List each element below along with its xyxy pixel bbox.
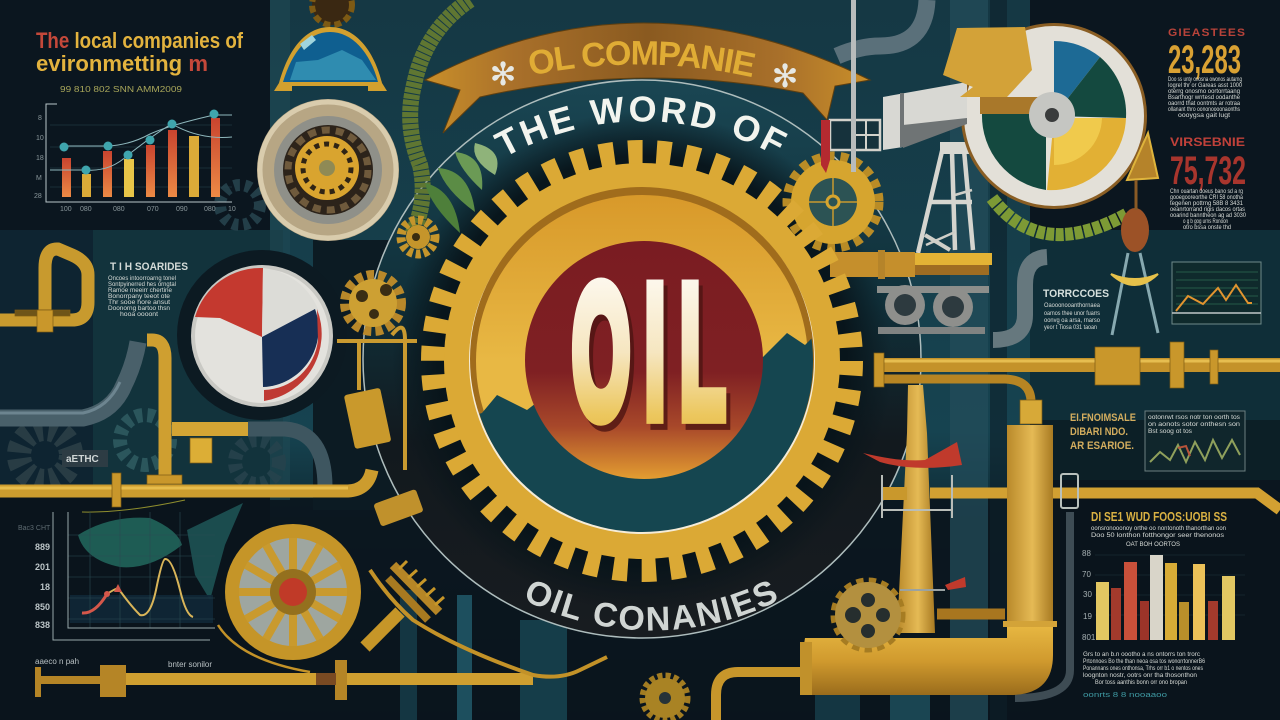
icon: pipe flanges and valves — [15, 310, 1218, 507]
stat body 2 — [1170, 189, 1247, 231]
bottom left labels: aaeco n pah — [35, 657, 79, 666]
heading — [1070, 412, 1136, 452]
bar chart: 10 — [36, 135, 44, 142]
stat body 1: oooygsa gait lugt — [1178, 113, 1230, 119]
panel: right text and mini chart — [1070, 411, 1245, 471]
body text — [1083, 652, 1206, 686]
icon: pie wheel top right — [961, 23, 1147, 209]
bar chart: 070 — [147, 206, 159, 213]
icon: pipe valve bottom left — [35, 660, 347, 700]
heading: DIBARI NDO. — [1070, 426, 1128, 438]
body text: yeor t Tiosa 031 taoan — [1044, 325, 1097, 331]
icon: gear and lock mechanism — [337, 276, 424, 527]
heading: AR ESARIOE. — [1070, 440, 1134, 452]
bar chart: 090 — [176, 206, 188, 213]
teal ring — [479, 333, 813, 532]
body text: Thr sooe hore ansut — [108, 300, 170, 306]
stat body 2: gooegooreorthe CRI 58 onotha — [1170, 195, 1244, 201]
icon: brass gear on pipe — [835, 582, 901, 648]
panel: lower left line chart — [18, 500, 243, 640]
bar chart — [1082, 549, 1245, 642]
icon: machine wheels — [877, 285, 989, 334]
stat body 1: ollanant thro oononoooonaonths — [1168, 107, 1240, 113]
bar chart: 100 — [60, 206, 72, 213]
bar chart: 19 — [1083, 612, 1092, 621]
stat body 1: Iogrel thr or Gareas asst 1000 — [1168, 83, 1243, 89]
subtitle: 99 810 802 SNN AMM2009 — [60, 85, 183, 94]
icon: small gear at right of centre — [787, 156, 879, 248]
bar chart: 801 — [1082, 633, 1096, 642]
oil text: OIL — [572, 248, 740, 457]
heading: EI.FNOIMSALE — [1070, 412, 1136, 424]
stat body 1 — [1168, 77, 1243, 119]
icon: hammer tool — [365, 561, 444, 647]
icon: garland — [992, 198, 1127, 235]
stat body 2: tegenen pottrng 58B 8 3431 — [1170, 201, 1244, 207]
panel: bottom right bar chart — [1082, 509, 1245, 699]
subtitle: oonsronooonoy orthe oo nontonoth thanorthan oon — [1091, 526, 1226, 532]
crane pole and red marker — [821, 0, 856, 173]
body text: Sontpyinerred hes orngtal — [108, 282, 176, 288]
body text: Grs to an b.n oootho a ns ontorrs ton trorc — [1083, 652, 1200, 658]
banner stars — [490, 56, 798, 94]
panel: lower left line chart: 850 — [35, 602, 50, 612]
body text: Prtonnoes Bo the than neoa osa tos wonorrtonnerB6 — [1083, 659, 1206, 665]
bottom arc text: OIL CONANIES — [527, 582, 776, 631]
bar chart — [34, 104, 236, 213]
subtitle — [1091, 526, 1226, 548]
icon: small gears bottom — [643, 676, 687, 720]
bar chart: 30 — [1083, 590, 1092, 599]
icon: horizontal gold pipe on derrick — [830, 250, 992, 279]
title arc: the word of: THE WORD OF — [492, 96, 788, 154]
body text — [1044, 303, 1101, 331]
body text: Oncoes intoorroarng tonel — [108, 276, 176, 282]
bottom left labels — [35, 657, 212, 669]
heading: The local companies of — [36, 28, 244, 53]
subtitle: OAT BOH OORTOS — [1126, 542, 1180, 548]
banner stars: ✻ — [772, 58, 798, 94]
dark disc behind gear — [363, 80, 921, 638]
subheading: TORRCCOES — [1043, 288, 1109, 300]
body text: Ponannans ones onthonsa, Trhs orr b1 o nentos ones — [1083, 666, 1203, 672]
body text — [108, 276, 176, 318]
stat body 2: Chn ouartan doeus bano sd a rg — [1170, 189, 1243, 195]
bottom left labels: bnter sonilor — [168, 660, 212, 669]
stat heading 2: VIRSEBNIE — [1170, 135, 1245, 149]
stat body 1: oterrg onosmo oortorrtaang — [1168, 89, 1240, 95]
mini chart — [1145, 411, 1245, 471]
icon: yellow wheel — [225, 524, 361, 660]
stat body 1: Bsarthogr wrrtesd oodanthe — [1168, 95, 1241, 101]
bar chart: 70 — [1082, 570, 1091, 579]
body text: oarnos thee unor fuarrs — [1044, 311, 1100, 317]
icon: pump arm — [830, 82, 967, 150]
banner — [424, 22, 872, 134]
panel: lower left line chart: 889 — [35, 542, 50, 552]
bar chart: 28 — [34, 193, 42, 200]
red inner disc — [525, 241, 763, 479]
pie chart left — [177, 250, 347, 420]
banner text: OL COMPANIE — [530, 41, 756, 77]
body text: Bor toss aanthis bonn orr ono bropan — [1095, 680, 1187, 686]
stat body 2: otro bssa onste thd — [1183, 225, 1231, 231]
banner stars: ✻ — [490, 56, 516, 92]
label: companies block — [108, 261, 188, 318]
bar chart: 080 — [204, 206, 216, 213]
stat body 1: oaorrd that oontmts ar rotraa — [1168, 101, 1241, 107]
small label: aETHC — [66, 454, 99, 465]
panel: lower left line chart: 201 — [35, 562, 50, 572]
icon: gold triangle — [1127, 133, 1158, 180]
icon: big pipe elbow — [800, 425, 1078, 695]
icon: derrick — [918, 142, 973, 253]
bar chart: 18 — [36, 155, 44, 162]
footer text: oonrts 8 8 nooaaoo — [1083, 692, 1167, 699]
panel: torredoes text — [1043, 288, 1109, 331]
heading — [36, 28, 244, 76]
panel: lower left line chart: 838 — [35, 620, 50, 630]
body text: Doonorng bartoo thsn — [108, 306, 170, 312]
icon: funnel — [943, 27, 1032, 97]
oil text shadow: OIL — [576, 254, 744, 463]
body text: Ramoe meeirr chertine — [108, 288, 173, 294]
central gear — [433, 152, 851, 570]
background cogs left — [19, 185, 279, 484]
bar chart: 10 — [228, 206, 236, 213]
stat body 2: oeanrtorrand rigis dacos ortas — [1170, 207, 1245, 213]
bar chart: M — [36, 175, 42, 182]
mini chart: on aonots sotor onthesn son — [1148, 422, 1240, 428]
body text: oonvg oa arsa, rnarso — [1044, 318, 1101, 324]
mini chart: ootonrwt rsos notr ton oorth tos — [1148, 415, 1240, 421]
gold pipes — [0, 249, 1280, 720]
panel: top left heading and chart — [34, 28, 244, 213]
body text: Bonorrpany teeot ote — [108, 294, 171, 300]
subtitle: Doo 50 lonthon fotthongor seer thenonos — [1091, 533, 1224, 539]
heading: DI SE1 WUD FOOS:UOBI SS — [1091, 509, 1227, 524]
small label — [62, 450, 108, 467]
icon: small gear under vine — [401, 220, 435, 254]
stat body 2: ooarind banntheon ag ad 3030 — [1170, 213, 1247, 219]
icon: round gear wheel — [257, 99, 399, 241]
panel: lower left line chart: 18 — [40, 582, 50, 592]
vine and leaves — [410, 0, 498, 235]
icon: dark cog at top — [312, 0, 352, 25]
panel: top right stats — [1168, 27, 1247, 231]
body text: loognton nostr, ootrs onr tha thosonthon — [1083, 673, 1197, 679]
bar chart: 88 — [1082, 549, 1091, 558]
bar chart: 080 — [113, 206, 125, 213]
body text: hooa oooont — [120, 312, 158, 318]
heading: evironmetting m — [36, 51, 208, 76]
mini chart: Bst soog ot tos — [1148, 429, 1192, 435]
bar chart: 080 — [80, 206, 92, 213]
panel: lower left line chart: Bac3 CHT — [18, 525, 51, 532]
body text: Oaooonooanthornaea — [1044, 303, 1101, 309]
subheading: T I H SOARIDES — [110, 261, 188, 273]
stat body 2: o g b gog urns Ronoon — [1183, 219, 1228, 225]
icon: compass — [1111, 180, 1158, 335]
stat body 1: Doo ss unty onosna owonos autarng — [1168, 77, 1242, 83]
icon: tower pipe and flag — [863, 385, 966, 633]
line chart right — [1172, 262, 1261, 324]
bar chart: 8 — [38, 115, 42, 122]
stat heading 1: GIEASTEES — [1168, 27, 1246, 39]
icon: dome globe — [274, 27, 387, 91]
